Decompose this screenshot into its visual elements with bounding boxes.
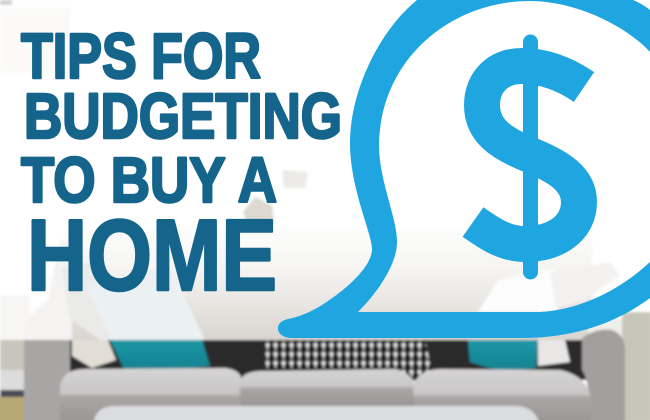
title line: TO BUY A: TO BUY A: [21, 144, 277, 216]
title line: HOME: HOME: [27, 200, 277, 312]
speech bubble outline: [278, 0, 650, 338]
icon: dollar sign: [473, 42, 584, 272]
title line: BUDGETING: BUDGETING: [24, 80, 342, 152]
title: [21, 20, 342, 312]
title line: TIPS FOR: TIPS FOR: [21, 20, 261, 92]
